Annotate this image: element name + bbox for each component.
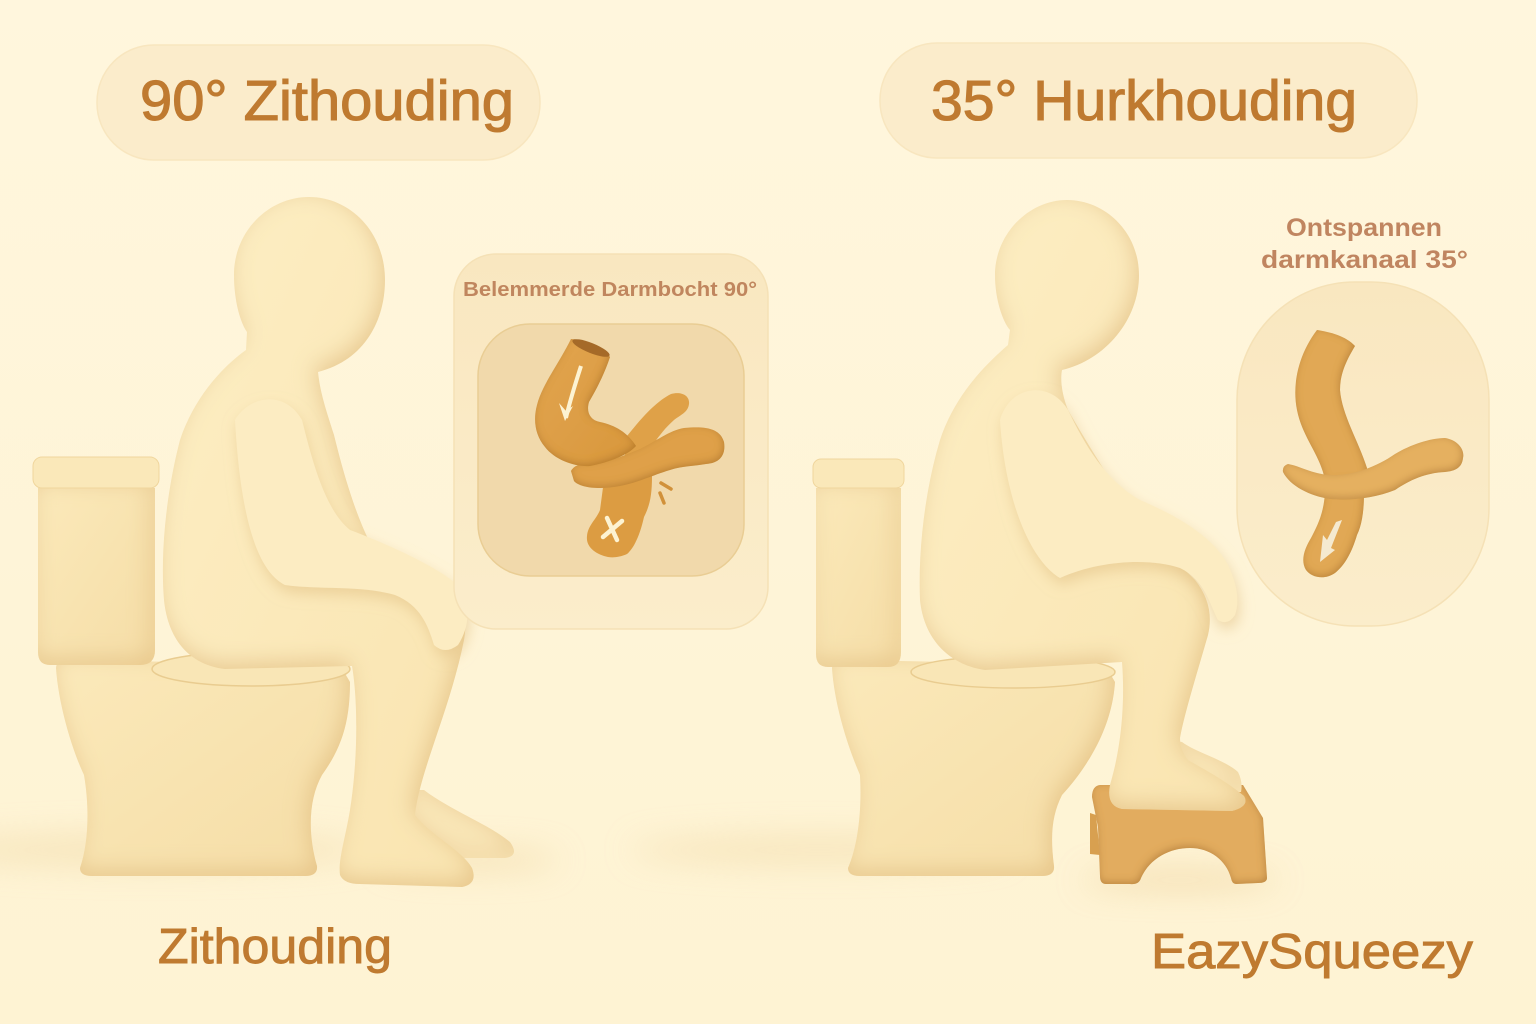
right panel title: Ontspannen darmkanaal 35°: darmkanaal 35° [1261,246,1468,274]
tube opening [571,336,611,360]
heading pill: 90° Zithouding [97,45,540,160]
toilet seat [152,652,350,686]
ground shadows [0,834,1280,888]
arm [1000,390,1237,622]
left panel: Belemmerde Darmbocht 90° [454,254,768,629]
label: EazySqueezy: EazySqueezy [1151,925,1474,979]
inner panel [478,324,744,576]
relaxed bowel [1283,330,1463,577]
x mark [603,518,622,540]
back foot [408,790,514,858]
label: Zithouding: Zithouding [158,920,392,974]
panel title: Belemmerde Darmbocht 90° [463,279,757,301]
toilet tank [816,488,901,667]
heading pill: 35° Hurkhouding: 35° Hurkhouding [931,69,1357,133]
toilet bowl [832,660,1115,876]
leak drops [660,483,671,503]
right panel title: Ontspannen darmkanaal 35° [1261,214,1468,274]
toilet lid [33,457,159,488]
toilet tank [38,488,155,665]
body, head and leg [920,200,1246,811]
toilet bowl [56,660,350,876]
footstool [1090,785,1267,884]
left toilet [33,457,350,876]
arrow down [1320,520,1342,562]
right toilet [813,459,1115,876]
left figure seated at 90° [163,197,514,887]
toilet lid [813,459,904,488]
heading pill: 90° Zithouding: 90° Zithouding [140,69,514,133]
back foot [1170,740,1242,792]
body, head and leg [163,197,474,887]
arm [235,399,467,650]
toilet seat [911,656,1115,688]
right panel: relaxed bowel capsule [1237,282,1489,626]
arrow down [559,366,581,421]
blocked bowel [535,336,724,557]
right figure squatting at 35° [920,200,1246,811]
right panel title: Ontspannen darmkanaal 35°: Ontspannen [1286,214,1442,242]
heading pill: 35° Hurkhouding [880,43,1417,158]
